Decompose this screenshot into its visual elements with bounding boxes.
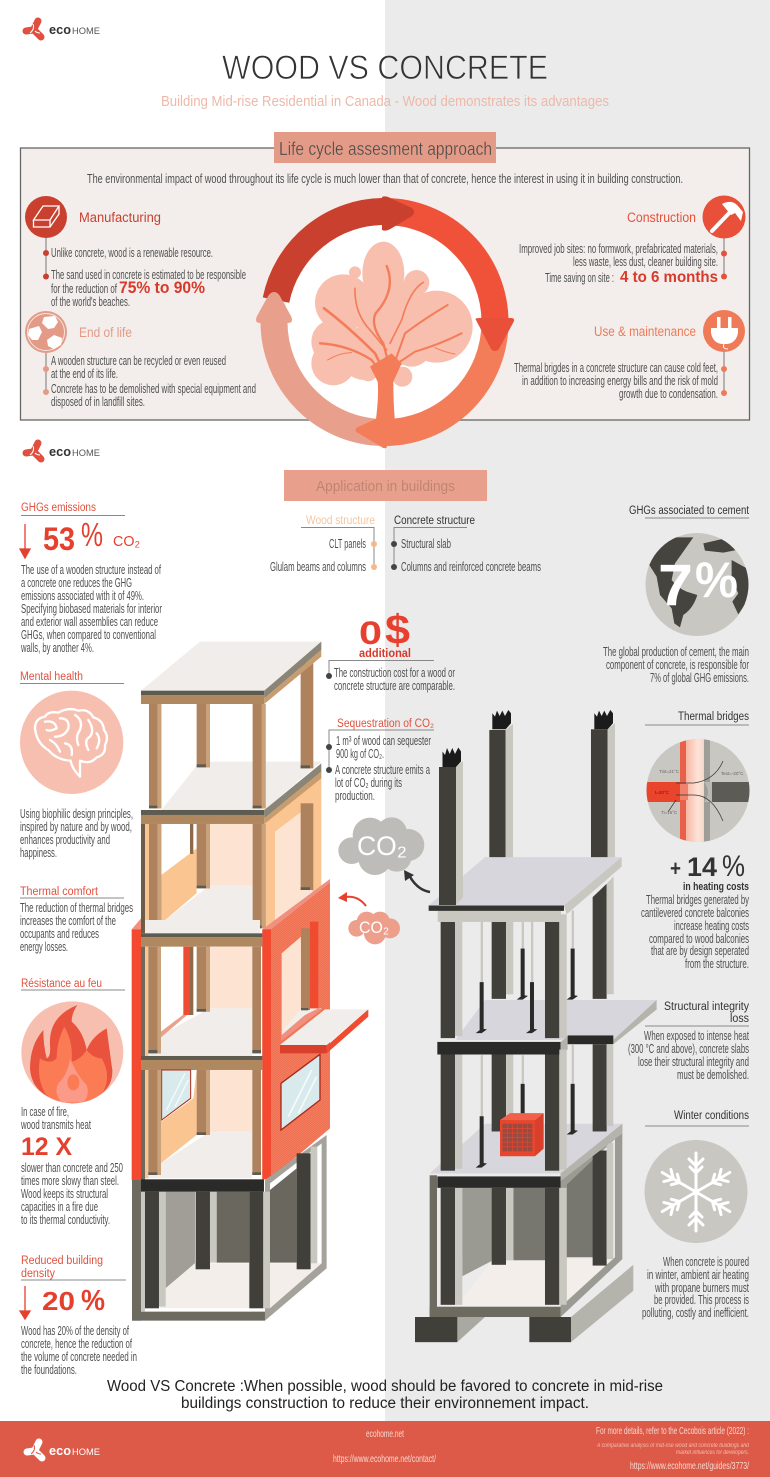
icon: down arrow (20, 524, 30, 558)
cloud: big CO2: CO₂ (357, 831, 407, 861)
text: GHGs: walls, by another 4%. (20, 641, 94, 655)
heading: manufacturing: Manufacturing (79, 210, 161, 225)
conclusion: Wood VS Concrete :When possible, wood should be favored to concrete in mid-rise (107, 1378, 663, 1395)
level 2 floor (457, 1133, 622, 1173)
text: fire: slower than concrete and 250 (21, 1161, 123, 1175)
text: GHGs: and exterior wall assemblies can reduce (21, 615, 158, 629)
logo: ecohome top: eco (49, 22, 71, 37)
balcony (280, 1009, 368, 1053)
legend: wood structure (270, 515, 377, 574)
arc: orange (356, 318, 514, 448)
arrow: red to wall (338, 892, 366, 906)
level 2 columns behind (492, 1054, 506, 1131)
heading: life cycle tab (274, 132, 496, 163)
legend: concrete structure: Structural slab (401, 537, 451, 551)
red columns (262, 929, 271, 1179)
icon: brick (25, 196, 67, 238)
text: end of life: at the end of its life. (51, 367, 118, 381)
text: end of life: disposed of in landfill sites. (51, 395, 145, 409)
floor 3 slab (145, 920, 260, 933)
heading: application in buildings (284, 470, 487, 501)
concrete columns (145, 1192, 159, 1308)
front columns top (149, 704, 161, 808)
legend: wood structure: Wood structure (306, 515, 375, 527)
footer links (333, 1428, 436, 1465)
block: thermal bridges: Thermal bridges (678, 711, 749, 723)
lower brick window (281, 1054, 320, 1130)
logo: ecohome footer (27, 1442, 100, 1458)
block: structural integrity loss (628, 1001, 749, 1082)
arc: salmon (256, 292, 385, 433)
text: GHGs: emissions associated with it of 49%. (21, 589, 144, 603)
upper brick window (282, 937, 301, 1032)
stat: plus 14 percent: in heating costs (683, 881, 749, 893)
cloud: small CO2: CO₂ (359, 918, 389, 937)
heading: end of life: End of life (79, 325, 132, 340)
level 2 columns front (441, 1054, 455, 1171)
subtitle: Building Mid-rise Residential in Canada - Wood demonstrates its advantages (161, 94, 609, 110)
concrete floors (415, 857, 657, 1342)
arc: red (382, 196, 495, 322)
text: GHGs: The use of a wooden structure instead of (21, 563, 161, 577)
footer links: https://www.ecohome.net/contact/ (333, 1453, 436, 1465)
callout: sequestration of CO2: production. (335, 789, 375, 803)
level 1 columns behind (492, 922, 506, 999)
text: mental health: enhances productivity and (20, 833, 110, 847)
icon: flame (21, 1001, 123, 1103)
block: thermal comfort (20, 886, 133, 954)
text: thermal comfort: increases the comfort of the (20, 914, 116, 928)
stat: 53 percent CO2: 53 (43, 521, 75, 557)
panel: life cycle (20, 132, 750, 420)
life cycle ring and tree (256, 196, 514, 448)
icon: globe 7 percent: 7 (658, 553, 693, 618)
icon: down arrow (20, 1286, 30, 1319)
text: thermal comfort: occupants and reduces (20, 927, 99, 941)
shores lower (476, 1044, 578, 1168)
block: structural integrity loss: loss (730, 1013, 749, 1025)
heading: application in buildings: Application in buildings (316, 478, 455, 495)
logo: ecohome top (26, 21, 100, 37)
footer links: ecohome.net (366, 1428, 404, 1440)
footing (457, 1317, 485, 1342)
icon: globe 7 percent: % (695, 552, 738, 608)
text: thermal comfort: The reduction of thermal bridges (20, 901, 133, 915)
stat: 20 percent (42, 1285, 105, 1317)
block: GHGs associated to cement (603, 505, 750, 685)
level 1 columns front (441, 922, 455, 1038)
front left column with rebar (439, 748, 463, 905)
level 2 deck (430, 1124, 622, 1173)
footer reference: market influences for developers. (676, 1450, 749, 1456)
logo: ecohome mid: eco (49, 444, 71, 459)
text: fire: 12 X (21, 1133, 72, 1161)
diagram: thermal bridge (646, 739, 750, 842)
legend: concrete structure (391, 515, 541, 574)
end of life block (25, 311, 256, 409)
callout: zero dollars additional (326, 606, 455, 693)
icon: hammer (702, 196, 746, 238)
text: mental health: inspired by nature and by wood, (20, 820, 132, 834)
ground back walls (462, 1188, 492, 1257)
callout: sequestration of CO2: Sequestration of CO₂ (337, 718, 434, 730)
text: thermal bridges (641, 893, 749, 971)
text: construction: Time saving on site : (545, 271, 614, 285)
wood building concrete ground floor (132, 1135, 327, 1321)
logo: ecohome footer: HOME (72, 1447, 100, 1457)
slab beams (437, 1042, 561, 1054)
wood building brick levels (132, 879, 368, 1180)
text: structural integrity (628, 1029, 749, 1082)
text: manufacturing: of the world's beaches. (51, 295, 130, 309)
stat: 20 percent: % (81, 1285, 105, 1317)
logo: ecohome mid (26, 443, 100, 459)
text: density (21, 1324, 137, 1377)
callout: sequestration of CO2 (326, 718, 434, 803)
conclusion: buildings construction to reduce their environnement impact. (181, 1395, 589, 1412)
block: winter conditions (642, 1110, 749, 1320)
icon: construction heater (500, 1113, 544, 1156)
text: mental health: happiness. (20, 846, 57, 860)
heading: life cycle tab: Life cycle assesment approach (279, 139, 492, 159)
conclusion (107, 1378, 663, 1412)
callout: sequestration of CO2: A concrete structure emits a (335, 763, 430, 777)
text: fire: to its thermal conductivity. (21, 1213, 110, 1227)
stat: 53 percent CO2: % (81, 516, 103, 553)
floor 4 slab (141, 1056, 262, 1060)
text: GHGs: Specifying biobased materials for interior (21, 602, 162, 616)
text: fire: times more slowy than steel. (21, 1174, 119, 1188)
wood building (132, 642, 368, 1321)
top deck (429, 857, 622, 906)
side frame (265, 1135, 327, 1321)
heading: construction: Construction (627, 210, 696, 225)
block: mental health: Mental health (20, 671, 83, 683)
level 1 deck (457, 1000, 657, 1040)
text: construction (519, 242, 718, 286)
text: fire: capacities in a fire due (21, 1200, 98, 1214)
callout: zero dollars additional: concrete structure are comparable. (334, 679, 455, 693)
text: construction: 4 to 6 months (620, 269, 718, 286)
shores upper (476, 910, 578, 1033)
block: reduced density: Reduced building (21, 1255, 103, 1267)
icon: plug (703, 310, 745, 352)
stat: 53 percent CO2: CO₂ (113, 533, 140, 550)
interior (166, 1192, 195, 1288)
cloud: big CO2 (338, 817, 424, 875)
text: manufacturing: for the reduction of (51, 282, 117, 296)
arc: dark red (262, 211, 385, 311)
block: GHGs associated to cement: GHGs associated to cement (629, 505, 750, 517)
roof slab (141, 642, 321, 691)
text: manufacturing: 75% to 90% (119, 279, 205, 297)
icon: snowflake (644, 1140, 748, 1243)
icon: brain (20, 691, 123, 794)
diagram: thermal bridge: Ti=16°C (661, 810, 678, 815)
text: cement (603, 645, 749, 685)
black beam (141, 1179, 264, 1192)
ground columns (441, 1188, 455, 1305)
text: manufacturing (51, 246, 246, 309)
level 2 (210, 824, 253, 885)
trunk and branches (370, 353, 402, 422)
logo: ecohome top: HOME (72, 26, 100, 36)
text: manufacturing: The sand used in concrete is estimated to be responsible (51, 268, 246, 282)
cloud: small CO2 (348, 912, 400, 944)
stat: plus 14 percent (670, 850, 749, 893)
callout: sequestration of CO2: 900 kg of CO₂. (336, 747, 384, 761)
block: reduced density: density (21, 1268, 55, 1280)
callout: zero dollars additional: The construction cost for a wood or (334, 666, 455, 680)
text: thermal comfort: energy losses. (20, 940, 68, 954)
block: mental health (20, 671, 133, 860)
callout: zero dollars additional: additional (359, 646, 411, 660)
text: GHGs: a concrete one reduces the GHG (21, 576, 132, 590)
block: winter conditions: Winter conditions (674, 1110, 749, 1122)
stat: plus 14 percent: 14 (687, 852, 717, 882)
back columns (197, 704, 210, 767)
text: density: concrete, hence the reduction of (21, 1337, 132, 1351)
wood building upper floors (141, 642, 321, 973)
callout: sequestration of CO2: lot of CO₂ during its (335, 776, 402, 790)
callout: zero dollars additional: $ (385, 606, 410, 653)
diagram: thermal bridge: Tint=21°C (659, 769, 680, 774)
diagram: thermal bridge: Text=-20°C (721, 771, 744, 776)
text: mental health: Using biophilic design principles, (20, 807, 133, 821)
legend: concrete structure: Columns and reinforced concrete beams (401, 560, 541, 574)
right side frame (561, 1124, 622, 1317)
block: fire resistance: Résistance au feu (21, 978, 102, 990)
text: end of life: Concrete has to be demolished with special equipment and (51, 382, 256, 396)
text: thermal comfort (20, 901, 133, 954)
block: thermal bridges (641, 711, 752, 971)
logo: ecohome footer: eco (49, 1443, 71, 1458)
text: fire: wood transmits heat (20, 1118, 91, 1132)
callout: sequestration of CO2: 1 m³ of wood can sequester (336, 734, 431, 748)
brick side wall (262, 883, 330, 1178)
text: fire (20, 1105, 123, 1227)
manufacturing block (25, 196, 246, 309)
heading: use and maintenance: Use & maintenance (594, 324, 696, 339)
text: manufacturing: Unlike concrete, wood is a renewable resource. (51, 246, 213, 260)
block: GHGs emissions (20, 502, 162, 655)
legend: wood structure: CLT panels (329, 537, 366, 551)
construction block (519, 196, 746, 286)
diagram: thermal bridge: t=20°C (655, 790, 670, 795)
slab 2 (141, 810, 264, 815)
stat: 53 percent CO2 (43, 516, 140, 557)
callout: zero dollars additional: 0 (359, 615, 382, 651)
logo: ecohome mid: HOME (72, 448, 100, 458)
stat: plus 14 percent: + (670, 856, 681, 881)
text: GHGs (20, 563, 162, 655)
use and maintenance block (514, 310, 745, 401)
level 3 (210, 947, 252, 1008)
concrete building (415, 710, 657, 1342)
block: fire resistance (20, 978, 125, 1227)
text: use and maintenance (514, 361, 718, 401)
text: fire: Wood keeps its structural (21, 1187, 108, 1201)
text: end of life: A wooden structure can be recycled or even reused (51, 354, 226, 368)
legend: concrete structure: Concrete structure (394, 515, 475, 527)
block: structural integrity loss: Structural integrity (664, 1001, 749, 1013)
text: density: the foundations. (21, 1363, 77, 1377)
text: mental health (20, 807, 133, 860)
text: end of life (51, 354, 256, 409)
foliage (311, 242, 473, 387)
arrow: dark to cloud (404, 870, 430, 892)
footer reference (596, 1425, 750, 1472)
icon: recycle (25, 311, 67, 353)
tree (311, 242, 473, 422)
block: reduced density (20, 1255, 137, 1377)
level 4 (210, 1070, 252, 1132)
stat: plus 14 percent: % (722, 850, 745, 883)
upper columns with rebar (489, 710, 615, 865)
block: GHGs emissions: GHGs emissions (21, 502, 96, 514)
title: WOOD VS CONCRETE (222, 49, 548, 87)
legend: wood structure: Glulam beams and columns (270, 560, 366, 574)
stat: 20 percent: 20 (42, 1286, 75, 1316)
top edge of brick (262, 879, 330, 929)
text: density: the volume of concrete needed in (21, 1350, 137, 1364)
block: thermal comfort: Thermal comfort (20, 886, 99, 898)
footer (0, 1421, 770, 1477)
text: density: Wood has 20% of the density of (21, 1324, 129, 1338)
side beige wall (264, 772, 321, 973)
text: GHGs: GHGs, when compared to conventional (21, 628, 156, 642)
text: fire: In case of fire, (21, 1105, 69, 1119)
text: winter (642, 1255, 749, 1320)
icon: globe 7 percent (646, 533, 750, 636)
